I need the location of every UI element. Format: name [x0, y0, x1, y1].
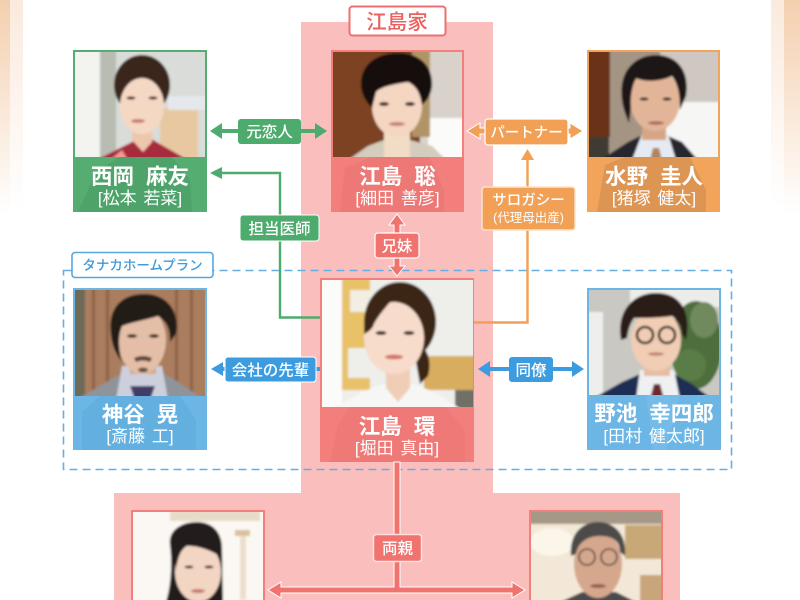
photo tint on name band: [330, 407, 465, 462]
heading: Ejima family: 江島家: [366, 11, 428, 34]
card: Mizuno Keito: [584, 47, 723, 212]
arrow: parents: 両親: [382, 540, 413, 558]
photo: Nishioka Mayu: [75, 52, 205, 157]
left decorative band: [0, 0, 23, 215]
arrow: partner: [467, 119, 583, 145]
photo tint on name band: [646, 395, 680, 450]
photo: mother: [133, 512, 263, 600]
panel: Ejima family background: [114, 22, 680, 600]
card: Kamiya Akira: [70, 285, 210, 450]
actor: Horita Mayu: [堀田 真由]: [355, 439, 439, 458]
arrow: ex-lovers: 元恋人: [246, 123, 293, 141]
panel: Tanaka Home Plan dashed group: タナカホームプラン: [82, 258, 203, 273]
name: Kamiya Akira: 神谷 晃: [102, 403, 178, 427]
arrow: surrogacy: サロガシー: [492, 192, 565, 209]
name: Ejima Satoshi: 江島 聡: [359, 165, 436, 189]
heading: Ejima family: [350, 6, 446, 36]
arrow: siblings: [375, 214, 419, 276]
photo: Noike Koshiro: [589, 290, 719, 395]
photo tint on name band: [78, 157, 192, 212]
photo: Ejima Satoshi: [333, 52, 462, 157]
photo: Ejima Tamaki: [322, 280, 473, 407]
card: Noike Koshiro: [584, 285, 724, 450]
arrow: attending doctor: [210, 167, 320, 318]
name: Nishioka Mayu: 西岡 麻友: [91, 165, 189, 189]
actor: Hosoda Yoshihiko: [細田 善彦]: [355, 189, 440, 208]
card: mother: [128, 507, 268, 600]
arrow: colleagues: [478, 357, 584, 382]
panel: Tanaka Home Plan dashed group: [64, 252, 732, 470]
right decorative band: [771, 0, 800, 215]
card: Ejima Satoshi: [328, 47, 467, 212]
arrow: partner: パートナー: [490, 124, 563, 142]
arrow: company senior: [211, 357, 320, 382]
arrow: parents: [268, 462, 525, 598]
name: Mizuno Keito: 水野 圭人: [605, 165, 703, 189]
name: Ejima Tamaki: 江島 環: [359, 415, 435, 439]
actor: Tamura Kentaro: [田村 健太郎]: [603, 427, 705, 446]
arrow: surrogacy: [474, 149, 575, 322]
actor: Saito Takumi: [斎藤 工]: [106, 427, 174, 446]
photo: Mizuno Keito: [589, 52, 718, 157]
card: Nishioka Mayu: [70, 47, 210, 212]
arrow: surrogacy: (代理母出産): [493, 211, 564, 225]
card: father: [526, 507, 666, 600]
photo: Kamiya Akira: [75, 290, 205, 396]
actor: Inozuka Kenta: [猪塚 健太]: [612, 189, 696, 208]
photo: father: [531, 512, 661, 600]
card: Ejima Tamaki: [317, 275, 478, 462]
photo tint on name band: [82, 396, 196, 450]
arrow: company senior: 会社の先輩: [232, 362, 309, 380]
arrow: siblings: 兄妹: [381, 238, 413, 256]
photo tint on name band: [340, 157, 444, 212]
arrow: colleagues: 同僚: [515, 362, 547, 380]
arrow: ex-lovers: [210, 119, 327, 144]
actor: Matsumoto Wakana: [松本 若菜]: [98, 189, 182, 208]
name: Noike Koshiro: 野池 幸四郎: [594, 402, 714, 426]
arrow: attending doctor: 担当医師: [248, 220, 311, 238]
photo tint on name band: [597, 157, 706, 212]
